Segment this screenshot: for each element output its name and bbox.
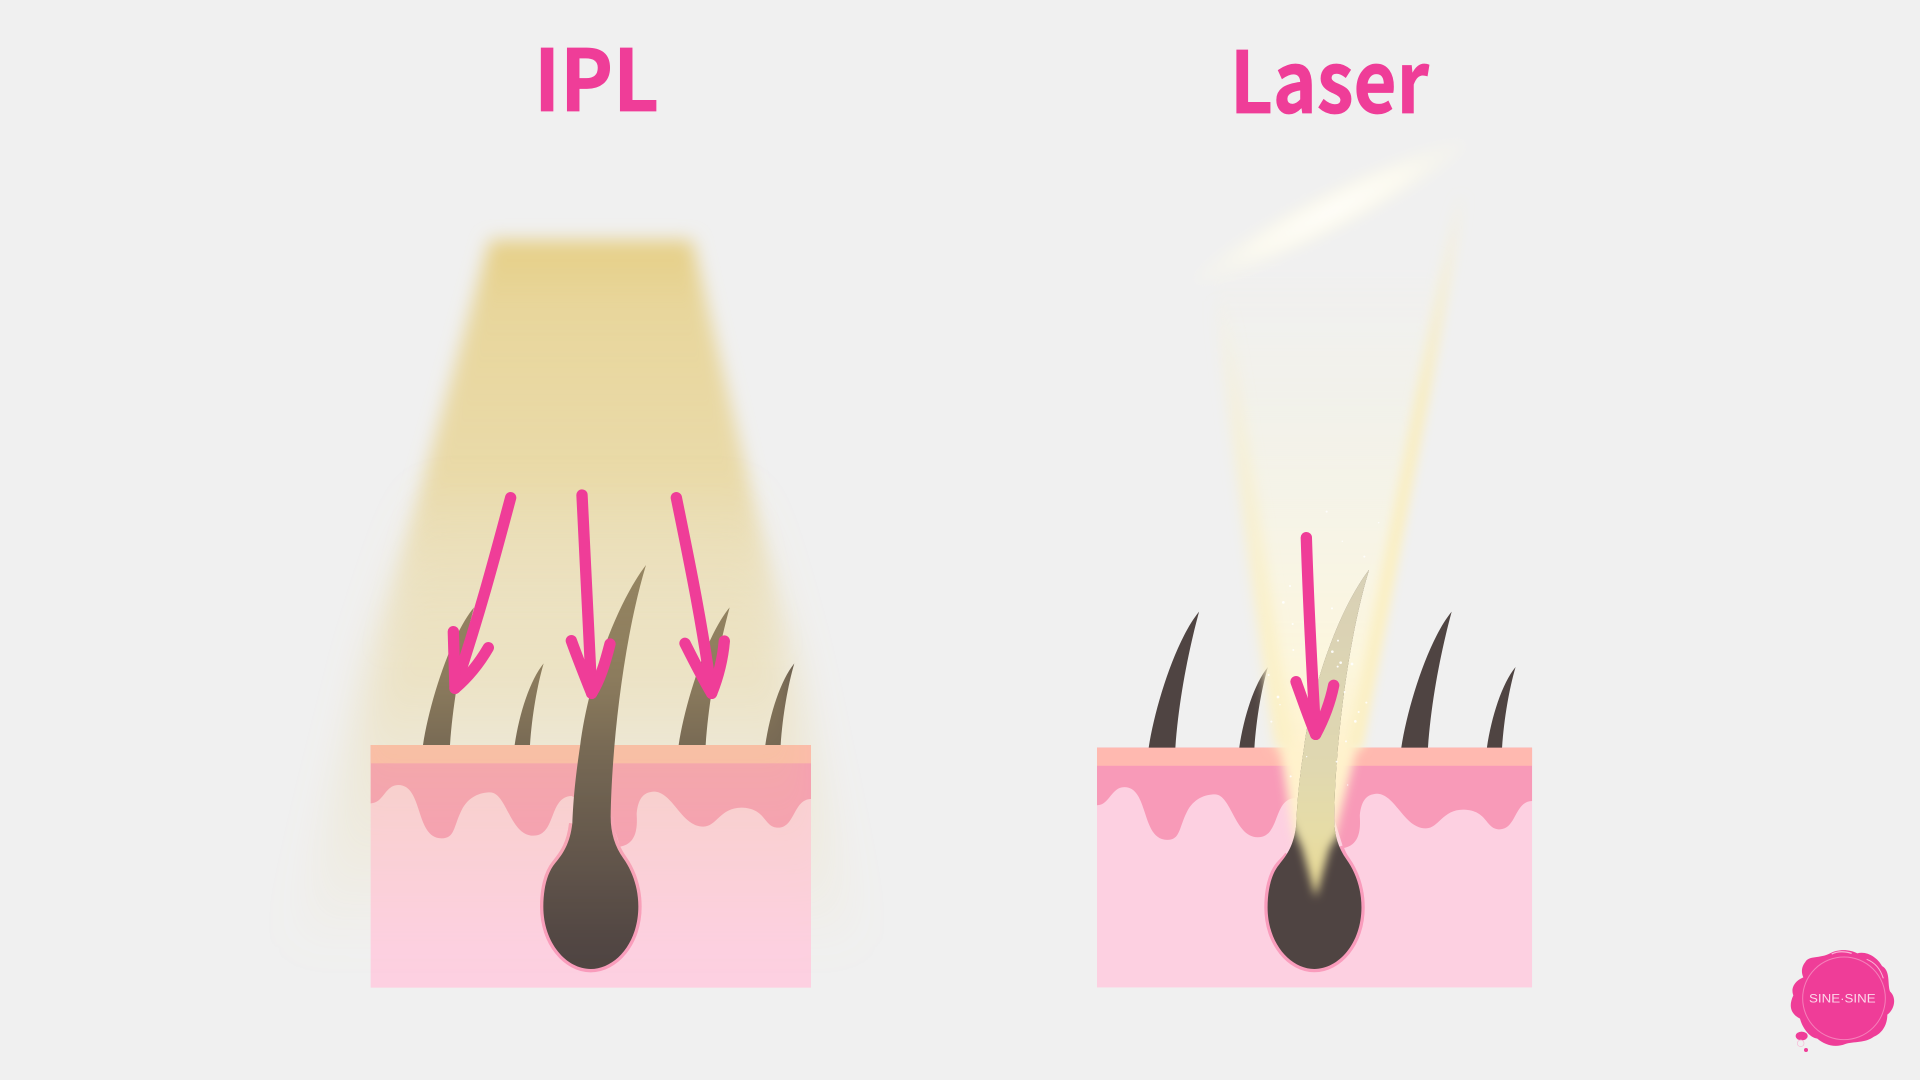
infographic canvas — [326, 48, 1894, 1052]
arrow: laser direction — [1296, 538, 1334, 734]
title: IPL: IPL — [534, 13, 659, 136]
panel: Laser diagram — [1097, 118, 1532, 987]
skin cross-section and side hairs — [1097, 612, 1532, 987]
arrows: light direction — [453, 495, 724, 693]
title: Laser: Laser — [1230, 15, 1430, 138]
IPL light beam — [292, 240, 860, 950]
skin cross-section and hairs — [371, 565, 811, 988]
logo: SINE SINE wax seal: SINE·SINE — [1809, 991, 1876, 1005]
panel: IPL diagram — [292, 240, 860, 988]
central hair and follicle — [1264, 570, 1369, 972]
sparks — [1268, 511, 1379, 786]
logo: SINE SINE wax seal — [1791, 950, 1894, 1052]
laser beam — [1177, 118, 1483, 900]
